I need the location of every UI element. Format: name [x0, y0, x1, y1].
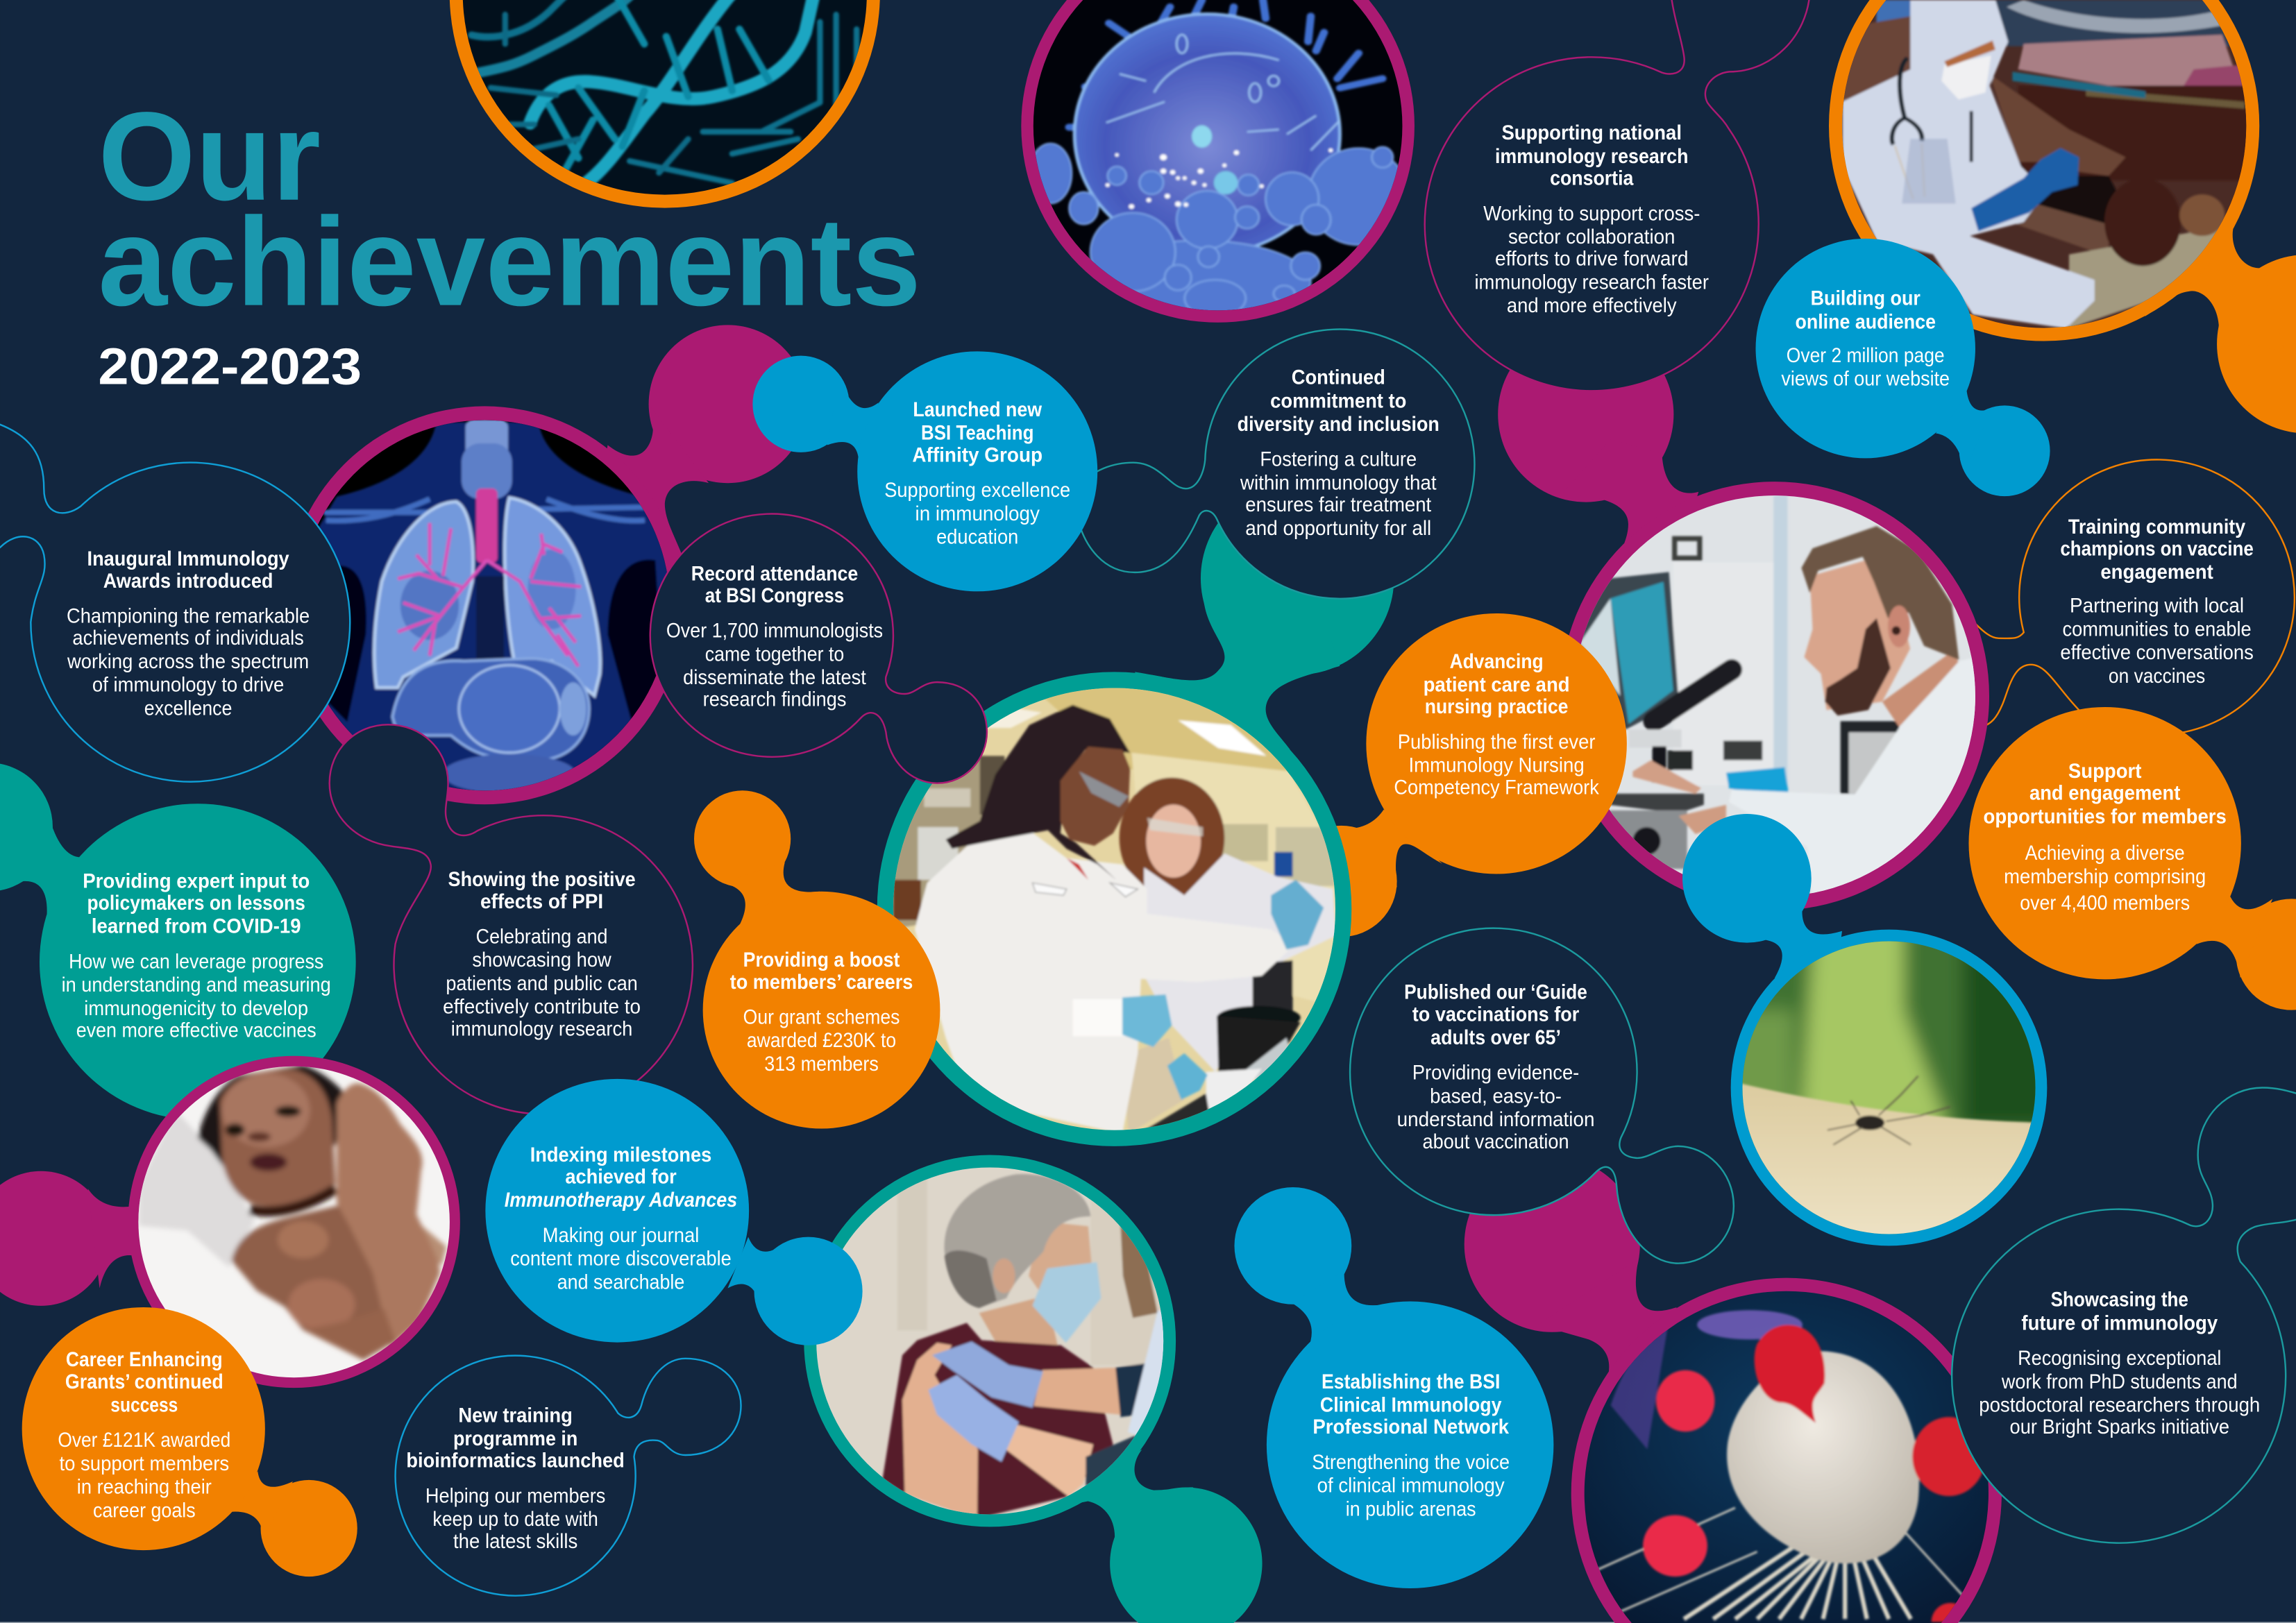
connector blob	[728, 1237, 863, 1345]
heading: at BSI Congress	[705, 584, 844, 607]
body text: effectively contribute to	[443, 996, 641, 1019]
heading: effects of PPI	[480, 890, 603, 913]
body text: Providing evidence-	[1412, 1062, 1579, 1085]
body text: Immunology Nursing	[1409, 754, 1585, 777]
body text: education	[936, 526, 1018, 549]
heading: Inaugural Immunology	[87, 547, 289, 570]
heading	[2021, 1289, 2218, 1334]
heading: to members’ careers	[730, 971, 913, 994]
heading	[1795, 287, 1936, 333]
connector blob	[1234, 1187, 1391, 1369]
body text: in reaching their	[77, 1476, 212, 1499]
connector blob	[0, 763, 88, 937]
panel: Establishing the BSI Clinical Immunology Professional Network	[1234, 1187, 1553, 1588]
body text: and opportunity for all	[1245, 517, 1431, 540]
heading: Supporting national	[1501, 121, 1682, 144]
heading: nursing practice	[1425, 695, 1568, 718]
connector blob	[752, 356, 879, 476]
body text: efforts to drive forward	[1495, 248, 1688, 271]
body text: ensures fair treatment	[1245, 493, 1431, 516]
connector blob	[0, 1171, 146, 1306]
connector blob	[1285, 810, 1442, 937]
panel: New training programme in bioinformatics	[396, 1356, 741, 1596]
body text: Championing the remarkable	[67, 604, 310, 627]
heading: Advancing	[1450, 650, 1544, 673]
heading: to vaccinations for	[1412, 1003, 1580, 1026]
heading: Continued	[1292, 366, 1385, 389]
body text: about vaccination	[1423, 1130, 1569, 1153]
title: Our	[98, 87, 321, 227]
connector blob	[1498, 326, 1698, 615]
connector blob	[586, 325, 807, 586]
body text: Working to support cross-	[1483, 202, 1700, 225]
body text: Recognising exceptional	[2018, 1347, 2221, 1370]
panel: Advancing patient care and nursing practice	[1285, 613, 1627, 937]
body text: sector collaboration	[1508, 226, 1675, 248]
body text: keep up to date with	[432, 1508, 598, 1531]
body text	[425, 1484, 605, 1553]
heading: bioinformatics launched	[406, 1450, 625, 1472]
body text	[743, 1006, 900, 1076]
heading: adults over 65’	[1430, 1026, 1561, 1049]
heading: Establishing the BSI	[1322, 1370, 1500, 1393]
panel: Covid policymakers input	[0, 763, 356, 1120]
body text: even more effective vaccines	[76, 1019, 316, 1042]
body text: Strengthening the voice	[1312, 1451, 1510, 1474]
body text: awarded £230K to	[747, 1029, 896, 1052]
heading: learned from COVID-19	[92, 915, 301, 938]
heading: Career Enhancing	[66, 1348, 223, 1371]
body text: excellence	[144, 697, 232, 720]
body text: communities to enable	[2062, 618, 2252, 640]
body text: in immunology	[915, 502, 1040, 525]
body text: postdoctoral researchers through	[1979, 1394, 2260, 1417]
heading: Launched new	[913, 398, 1043, 421]
body text: Helping our members	[425, 1484, 605, 1507]
body text: Over £121K awarded	[58, 1429, 230, 1452]
heading: Indexing milestones	[530, 1144, 711, 1166]
heading: success	[110, 1394, 178, 1417]
heading: Providing a boost	[743, 949, 900, 971]
body text: in understanding and measuring	[62, 974, 331, 996]
heading: Building our	[1811, 287, 1921, 310]
body text: in public arenas	[1346, 1497, 1476, 1520]
body text: showcasing how	[472, 949, 611, 971]
body text: understand information	[1397, 1108, 1594, 1131]
panel: Continued commitment to diversity and inclusion	[1077, 330, 1474, 599]
photo: DNA strands	[450, 0, 880, 208]
body text: views of our website	[1781, 368, 1950, 391]
body text: Celebrating and	[476, 925, 608, 948]
heading	[1424, 650, 1570, 718]
heading: immunology research	[1495, 145, 1688, 168]
panel: Providing a boost to members' careers	[694, 790, 940, 1129]
heading	[1495, 121, 1688, 190]
heading	[1404, 981, 1587, 1049]
body text	[2060, 595, 2254, 688]
heading: Awards introduced	[103, 570, 273, 593]
body text: content more discoverable	[510, 1248, 732, 1271]
body text: Fostering a culture	[1260, 448, 1417, 471]
body text: Over 2 million page	[1787, 344, 1945, 367]
body text: and more effectively	[1507, 294, 1677, 317]
connector blob	[2197, 893, 2296, 1010]
body text: Achieving a diverse	[2025, 842, 2185, 865]
body text	[1979, 1347, 2260, 1438]
body text: the latest skills	[453, 1530, 577, 1553]
title: 2022-2023	[98, 338, 362, 396]
body text	[884, 479, 1070, 549]
panel: Support and engagement opportunities for members	[1968, 707, 2296, 1010]
body text: membership comprising	[2004, 865, 2206, 888]
body text: disseminate the latest	[683, 666, 866, 689]
heading	[1238, 366, 1440, 436]
body text: on vaccines	[2109, 665, 2205, 688]
panel: Supporting national immunology research consortia	[1425, 0, 1810, 391]
photo: cancer cell with magenta connector blob	[1464, 1157, 2002, 1623]
heading	[1312, 1370, 1510, 1438]
title: achievements	[98, 192, 921, 332]
heading	[505, 1144, 737, 1212]
connector blob	[1464, 1157, 1677, 1405]
heading: Showing the positive	[448, 868, 636, 891]
heading	[730, 949, 913, 994]
heading	[65, 1348, 223, 1417]
heading	[912, 398, 1043, 466]
photo: vaccination with teal connector blob	[804, 1155, 1263, 1623]
connector blob	[1936, 389, 2050, 496]
heading: Grants’ continued	[65, 1370, 223, 1393]
body text	[2004, 842, 2206, 915]
heading: Training community	[2068, 516, 2246, 538]
body text: our Bright Sparks initiative	[2010, 1416, 2229, 1438]
heading: Providing expert input to	[83, 869, 310, 892]
body text	[1312, 1451, 1510, 1520]
heading: commitment to	[1270, 389, 1406, 412]
heading: BSI Teaching	[921, 422, 1033, 445]
heading	[691, 562, 858, 607]
panel: Building our online audience	[1756, 239, 2050, 496]
connector blob	[1054, 1450, 1263, 1623]
photo: baby with magenta connector blob	[0, 1056, 460, 1388]
photo: farmer with orange connector blob	[1829, 0, 2296, 433]
body text: Over 1,700 immunologists	[666, 620, 883, 643]
body text: How we can leverage progress	[69, 950, 323, 973]
heading: achieved for	[565, 1165, 677, 1188]
heading: consortia	[1550, 167, 1634, 190]
panel: Record attendance at BSI Congress	[650, 514, 987, 783]
body text	[1240, 448, 1437, 540]
body text	[1394, 731, 1599, 799]
body text	[67, 604, 310, 720]
connector blob	[694, 790, 820, 925]
body text: and searchable	[557, 1271, 684, 1293]
body text: Competency Framework	[1394, 776, 1599, 799]
heading: future of immunology	[2021, 1311, 2218, 1334]
heading	[1984, 760, 2227, 828]
connector blob	[227, 1471, 357, 1577]
photo: scientist at microscope with magenta connector blob	[1498, 326, 1989, 910]
body text: based, easy-to-	[1430, 1085, 1562, 1107]
heading: programme in	[453, 1427, 577, 1450]
heading: Support	[2068, 760, 2142, 783]
body text: Making our journal	[543, 1224, 699, 1247]
panel: Career Enhancing Grants	[22, 1307, 357, 1577]
photo: lungs with magenta connector blob	[285, 325, 807, 804]
body text: Partnering with local	[2070, 595, 2244, 618]
heading: Professional Network	[1312, 1416, 1510, 1438]
heading	[87, 547, 289, 593]
body text: research findings	[703, 688, 846, 711]
heading	[448, 868, 636, 913]
body text: immunogenicity to develop	[84, 997, 308, 1020]
photo: lab researchers with teal connector blob	[877, 482, 1394, 1146]
body text: within immunology that	[1240, 471, 1437, 494]
heading: opportunities for members	[1984, 805, 2227, 828]
heading	[83, 869, 310, 938]
body text: Our grant schemes	[743, 1006, 900, 1029]
body text	[510, 1224, 732, 1293]
body text	[1474, 202, 1709, 317]
heading: online audience	[1795, 310, 1936, 333]
heading: patient care and	[1424, 674, 1570, 697]
body text	[58, 1429, 230, 1522]
heading: Showcasing the	[2051, 1289, 2188, 1311]
connector blob	[1135, 482, 1394, 749]
body text: came together to	[705, 643, 844, 665]
body text	[1397, 1062, 1594, 1153]
body text: immunology research faster	[1474, 271, 1709, 294]
heading: New training	[458, 1404, 573, 1427]
body text: of immunology to drive	[92, 674, 284, 697]
heading: diversity and inclusion	[1238, 413, 1440, 436]
heading: Affinity Group	[912, 443, 1043, 466]
body text: 313 members	[764, 1053, 879, 1076]
connector blob	[1682, 814, 1842, 1025]
panel: Training community champions	[1962, 459, 2295, 735]
heading: champions on vaccine	[2060, 537, 2254, 560]
body text: work from PhD students and	[2001, 1370, 2238, 1393]
panel: Published guide to vaccinations for adults over 65	[1350, 928, 1734, 1264]
panel: Showcasing the future of immunology	[1952, 1087, 2296, 1543]
heading: policymakers on lessons	[87, 892, 305, 915]
body text: over 4,400 members	[2020, 892, 2190, 915]
heading: Immunotherapy Advances	[505, 1189, 737, 1212]
heading	[406, 1404, 625, 1472]
heading: Published our ‘Guide	[1404, 981, 1587, 1004]
body text: effective conversations	[2060, 641, 2254, 664]
body text	[666, 620, 883, 711]
body text	[443, 925, 641, 1040]
heading	[2060, 516, 2254, 584]
body text: Supporting excellence	[884, 479, 1070, 502]
body text: of clinical immunology	[1317, 1475, 1505, 1497]
body text: to support members	[59, 1452, 229, 1475]
body text	[62, 950, 331, 1042]
title	[98, 87, 921, 396]
body text: career goals	[93, 1499, 196, 1522]
photo: mosquito with blue connector blob	[1682, 814, 2065, 1259]
panel: Inaugural Immunology Awards	[0, 425, 350, 782]
heading: Clinical Immunology	[1320, 1394, 1502, 1417]
body text	[1781, 344, 1950, 391]
body text: achievements of individuals	[72, 627, 304, 649]
body text: working across the spectrum	[67, 650, 309, 673]
photo: immune cell	[1021, 0, 1415, 324]
heading: engagement	[2100, 561, 2213, 584]
heading: Record attendance	[691, 562, 858, 585]
body text: immunology research	[451, 1017, 632, 1040]
panel: Showing the positive effects of PPI	[330, 724, 693, 1114]
heading: and engagement	[2029, 782, 2180, 805]
connector blob	[2109, 219, 2296, 433]
panel: Launched new BSI Teaching Affinity Group	[752, 351, 1097, 591]
body text: Publishing the first ever	[1398, 731, 1596, 754]
panel: Indexing milestones for Immunotherapy Advances	[485, 1079, 863, 1345]
body text: patients and public can	[446, 972, 638, 995]
